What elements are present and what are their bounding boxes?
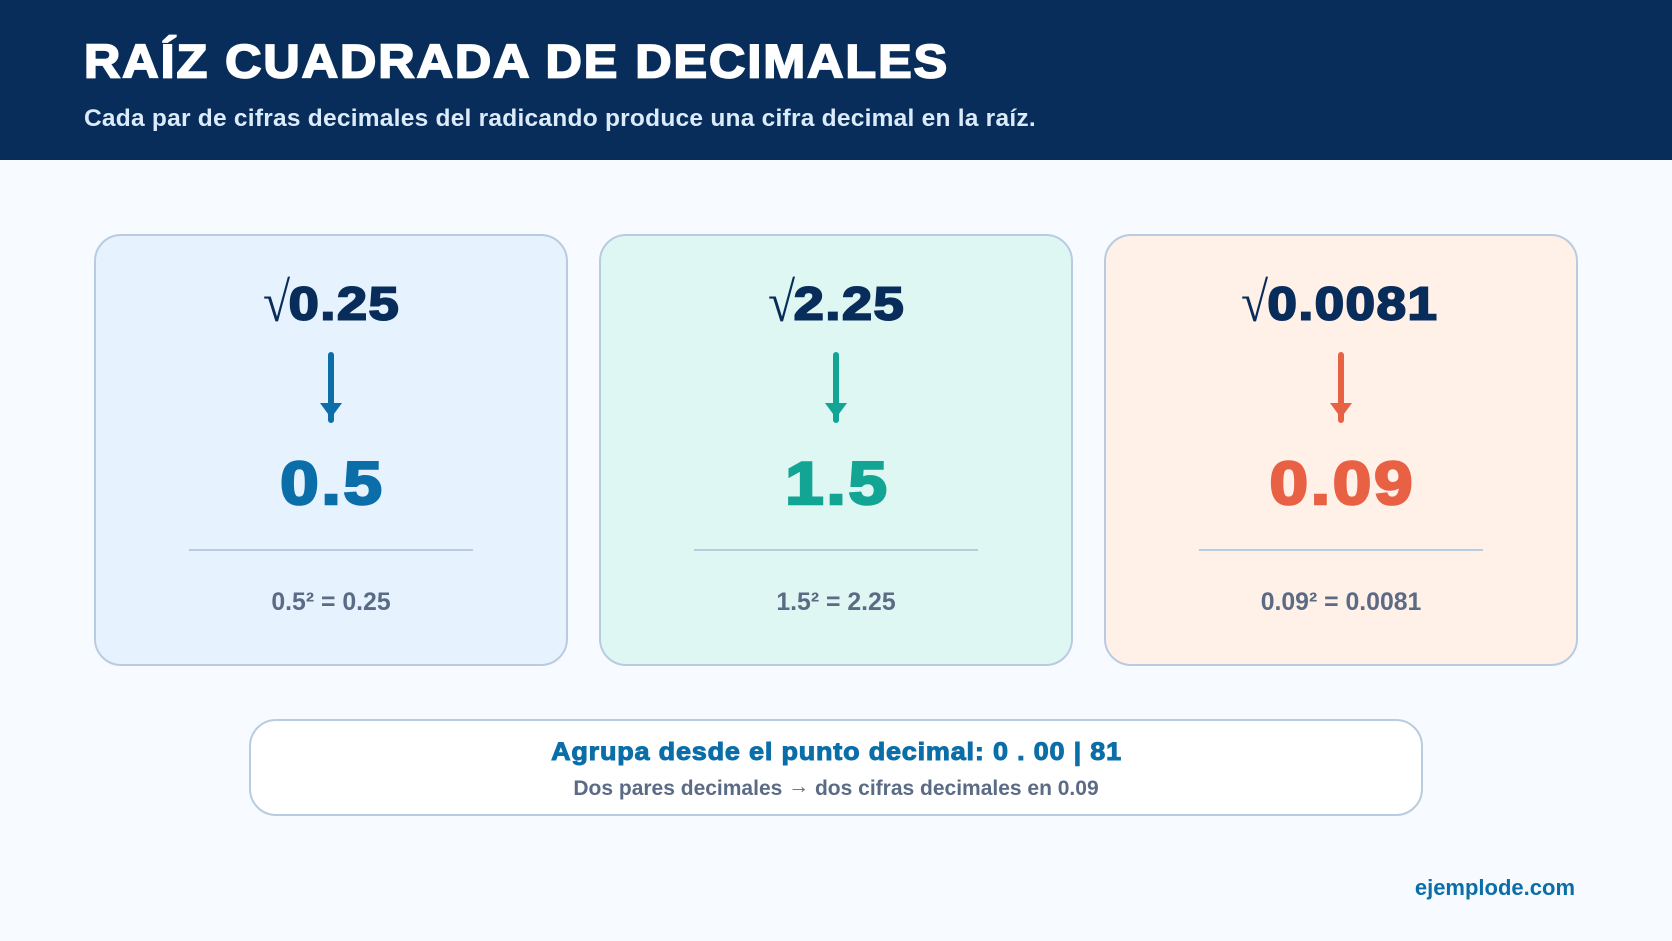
radicand: 0.0081: [1268, 277, 1438, 330]
panel: 2.25: [600, 235, 1072, 665]
arrow: [825, 355, 847, 420]
result: 0.09: [1270, 449, 1415, 517]
arrow: [1330, 355, 1352, 420]
radical sign: √: [768, 272, 795, 334]
check formula: 0.5² = 0.25: [271, 589, 391, 616]
check formula: 1.5² = 2.25: [776, 589, 896, 616]
panel: 0.0081: [1105, 235, 1577, 665]
footer brand: ejemplode.com: [1415, 875, 1575, 900]
check formula: 0.09² = 0.0081: [1261, 589, 1422, 616]
callout heading: Agrupa desde el punto decimal: 0 . 00 | 81: [551, 737, 1122, 766]
radical sign: √: [1241, 272, 1268, 334]
callout: grouping rule: [250, 720, 1422, 815]
header band: [0, 0, 1672, 160]
panel: 0.25: [95, 235, 567, 665]
callout note: dos cifras decimales en 0.09: [809, 777, 1099, 800]
subtitle: Cada par de cifras decimales del radicando produce una cifra decimal en la raíz.: [84, 105, 1036, 132]
callout note: →: [788, 775, 809, 798]
title: RAÍZ CUADRADA DE DECIMALES: [84, 36, 949, 88]
radicand: 0.25: [289, 277, 400, 330]
result: 0.5: [280, 449, 385, 517]
radicand: 2.25: [794, 277, 905, 330]
callout note: Dos pares decimales: [573, 777, 782, 800]
radical sign: √: [263, 272, 290, 334]
result: 1.5: [785, 449, 890, 517]
arrow: [320, 355, 342, 420]
